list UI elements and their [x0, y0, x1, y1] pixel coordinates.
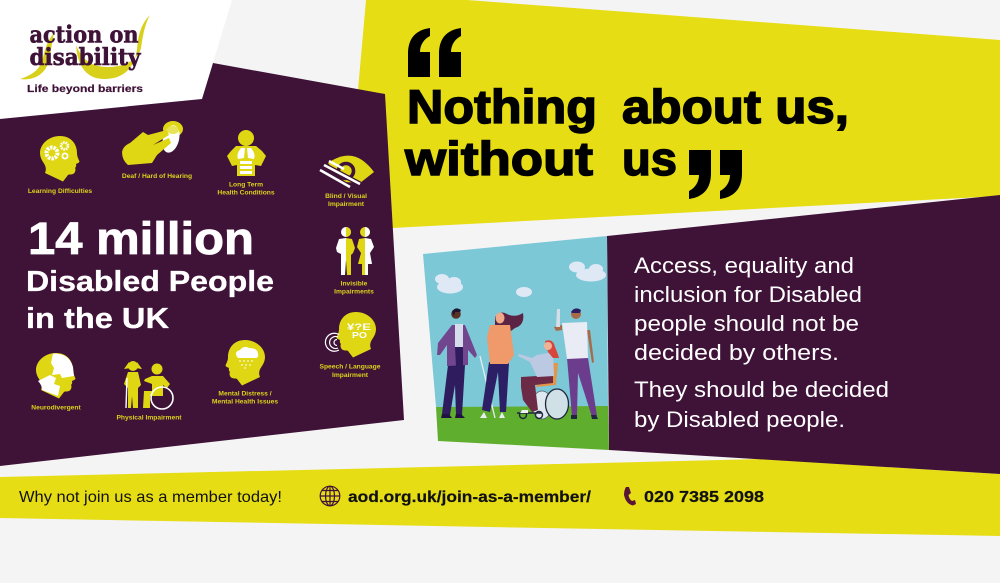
footer call to action: Why not join us as a member today!: [19, 489, 282, 506]
heading: 14 million: 14 million: [28, 213, 254, 264]
icon: speech / language impairment: Impairment: [332, 372, 369, 379]
icon: deaf / hard of hearing: Deaf / Hard of Hearing: [122, 173, 192, 180]
text block: decided by disabled people: by Disabled people.: [634, 407, 845, 432]
icon: closing quotation mark: [689, 150, 742, 199]
text block: decided by disabled people: [634, 377, 889, 432]
sky: [423, 236, 608, 407]
man with prosthetic arm: [554, 308, 598, 419]
logo wordmark: disability: [30, 44, 141, 71]
heading: Disabled People in the UK: in the UK: [26, 303, 169, 335]
logo wordmark: [30, 22, 141, 71]
panel: purple statistics panel: [0, 63, 404, 466]
icon: long term health conditions: [217, 130, 275, 196]
icon: speech / language impairment: PO: [352, 330, 367, 340]
woman with white cane: [480, 312, 523, 418]
icon: speech / language impairment: [320, 312, 381, 379]
grass: [436, 406, 609, 450]
woman in wheelchair: [517, 340, 568, 419]
heading: Disabled People in the UK: [26, 266, 274, 335]
icon: blind / visual impairment: [320, 156, 374, 208]
icon: neurodivergent: [31, 353, 81, 412]
icon: globe: [320, 486, 340, 506]
panel: yellow quote banner: [358, 0, 1000, 228]
icon: mental distress: [212, 340, 278, 406]
icon: neurodivergent: Neurodivergent: [31, 404, 81, 412]
icon: mental distress: Mental Health Issues: [212, 398, 278, 406]
text block: access, equality and inclusion: decided by others.: [634, 340, 839, 365]
heading: Nothing about us, without us: Nothing: [407, 80, 597, 133]
text block: access, equality and inclusion: inclusion for Disabled: [634, 282, 862, 307]
icon: mental distress: Mental Distress /: [218, 390, 272, 398]
icon: learning difficulties: Learning Difficulties: [28, 188, 92, 195]
man with cane: [437, 308, 495, 418]
heading: Nothing about us, without us: us: [622, 132, 677, 185]
panel: yellow footer band: [0, 459, 1000, 536]
text block: access, equality and inclusion: [634, 253, 862, 365]
icon: invisible impairments: [334, 227, 374, 296]
icon: blind / visual impairment: Impairment: [328, 201, 365, 208]
icon: invisible impairments: Impairments: [334, 288, 374, 296]
icon: deaf / hard of hearing: [122, 121, 192, 180]
text block: decided by disabled people: They should be decided: [634, 377, 889, 402]
icon: long term health conditions: Health Conditions: [217, 190, 275, 196]
heading: Nothing about us, without us: about us,: [622, 80, 849, 133]
logo wordmark: action on: [30, 22, 139, 48]
icon: learning difficulties: [28, 136, 92, 195]
icon: speech / language impairment: ¥?E: [347, 322, 371, 332]
text block: access, equality and inclusion: Access, equality and: [634, 253, 854, 278]
icon: telephone: [624, 487, 636, 506]
heading: Nothing about us, without us: without: [404, 132, 593, 185]
icon: opening quotation mark: [408, 28, 461, 77]
footer website link: aod.org.uk/join-as-a-member/: [348, 489, 592, 506]
panel: white logo background: [0, 0, 232, 119]
logo swoosh: [20, 15, 150, 79]
icon: speech / language impairment: Speech / Language: [320, 364, 381, 370]
logo tagline: Life beyond barriers: [27, 83, 143, 95]
icon: physical impairment: Physical Impairment: [116, 414, 182, 422]
icon: long term health conditions: Long Term: [229, 182, 263, 188]
footer phone number: 020 7385 2098: [644, 489, 764, 506]
icon: invisible impairments: Invisible: [341, 280, 368, 288]
logo: [20, 15, 150, 95]
heading: Nothing about us, without us: [404, 80, 849, 185]
panel: purple message panel: [607, 195, 1000, 474]
icon: physical impairment: [116, 361, 182, 422]
text block: access, equality and inclusion: people should not be: [634, 311, 859, 336]
heading: Disabled People in the UK: Disabled People: [26, 266, 274, 298]
icon: blind / visual impairment: Blind / Visual: [325, 193, 367, 200]
illustration: group of disabled people outdoors: [423, 236, 609, 450]
clouds: [435, 262, 606, 297]
